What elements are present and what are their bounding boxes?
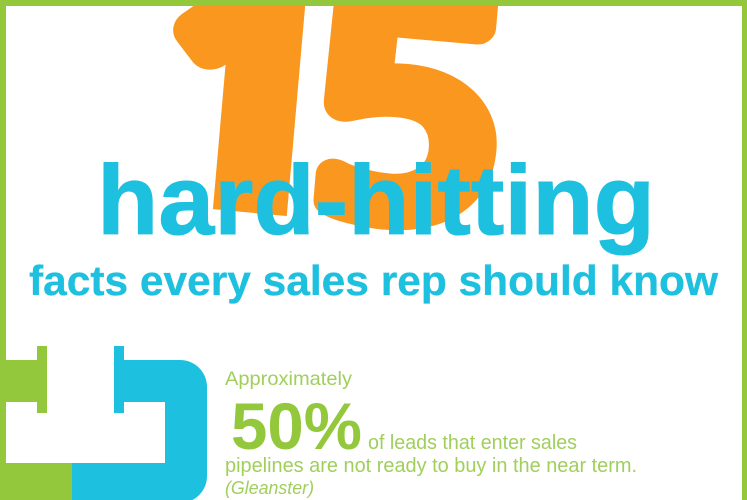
fact line 2: pipelines are not ready to buy in the near term. <box>225 455 637 477</box>
fact line 1: of leads that enter sales <box>368 432 577 454</box>
statistic: 50%: 50% <box>231 389 362 463</box>
icon: puzzle connector block <box>0 346 207 500</box>
fact text block <box>225 368 637 498</box>
lead-in text: Approximately <box>225 368 352 390</box>
title: hard-hitting: hard-hitting <box>97 145 655 255</box>
subtitle: facts every sales rep should know <box>29 257 718 304</box>
big orange number 15 <box>173 6 498 230</box>
source: (Gleanster) <box>225 478 314 498</box>
